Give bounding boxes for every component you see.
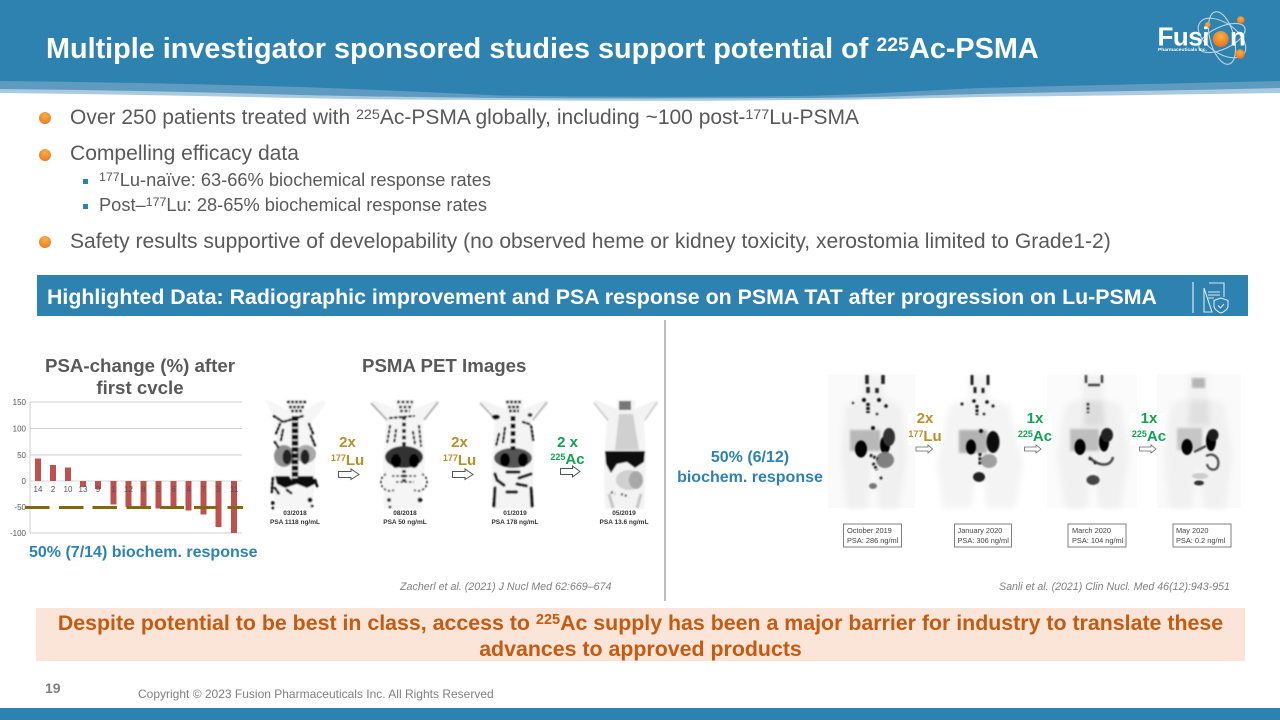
citation: Sanli: Sanli et al. (2021) Clin Nucl. Med 46(12):943-951 [999, 581, 1230, 593]
patient labels: 8 [141, 485, 146, 494]
treatment label: 2x 177Lu [331, 434, 364, 469]
treatment label: 2x 177Lu [443, 434, 476, 469]
arrows [338, 466, 580, 480]
bullet 2 [39, 149, 51, 161]
treatment label: 2 x 225Ac: 2 x [557, 434, 578, 451]
PSA label text [847, 526, 1226, 545]
scan 05/2019 [593, 400, 659, 509]
left PET image series [267, 400, 658, 526]
logo: Fusion Pharmaceuticals: Pharmaceuticals Inc. [1158, 47, 1207, 53]
treatment label: 2x 177Lu: 2x [451, 434, 468, 451]
PSA label text: PSA: 286 ng/ml [847, 536, 899, 545]
bar chart: PSA change [10, 398, 243, 538]
patient labels: 2 [51, 485, 56, 494]
patient labels: 5 [156, 485, 161, 494]
heading: PSMA PET images: PSMA PET Images [362, 355, 526, 376]
scan 01/2019 [480, 400, 549, 509]
PSA label text: October 2019 [847, 526, 892, 535]
icon: document with shield [1192, 282, 1229, 314]
bullet 1 [39, 112, 51, 124]
treatment label: 1x 225Ac [1018, 410, 1052, 445]
treatment label: 1x 225Ac: 225Ac [1018, 428, 1052, 445]
citation: Zacherl: Zacherl et al. (2021) J Nucl Med 62:669–674 [400, 581, 612, 593]
left scan captions: PSA 178 ng/mL [491, 519, 539, 526]
heading: PSA-change: first cvcle [96, 377, 184, 398]
panel divider [664, 320, 666, 601]
left scan captions: PSA 13.6 ng/mL [600, 519, 648, 526]
conclusion callout: advances to approved products [479, 637, 802, 661]
treatment label: 1x 225Ac: 225Ac [1132, 428, 1166, 445]
treatment label: 2 x 225Ac: 225Ac [550, 451, 585, 468]
patient labels: 7 [201, 485, 206, 494]
treatment label: 1x 225Ac [1132, 410, 1166, 445]
threshold line at -50% [25, 506, 243, 509]
left scan captions: 05/2019 [612, 510, 636, 517]
bullet 3 [39, 236, 51, 248]
title: Multiple investigator sponsored studies support potential of 225Ac-PSMA [46, 33, 1039, 65]
callout: biochemical response right: 50% (6/12) [711, 449, 789, 466]
axis labels: -50 [14, 503, 27, 512]
PSA label text: May 2020 [1176, 526, 1208, 535]
left scan captions: 03/2018 [283, 510, 307, 517]
treatment label: 2x 177Lu: 2x [339, 434, 356, 451]
scan 03/2018 [265, 400, 326, 510]
PSA label text: January 2020 [958, 526, 1002, 535]
treatment label: 2x 177Lu: 177Lu [908, 428, 942, 445]
footer bar [0, 708, 1280, 720]
patient labels: 6 [171, 485, 176, 494]
treatment label: 1x 225Ac: 1x [1141, 410, 1157, 427]
patient labels: 11 [230, 485, 239, 494]
scan 08/2018 [371, 400, 440, 509]
arrows [916, 445, 1156, 453]
treatment label: 2 x 225Ac [550, 434, 585, 468]
right PET image series [840, 374, 1233, 548]
bullet list [39, 106, 1111, 253]
PSA label text: PSA: 0.2 ng/ml [1176, 536, 1226, 545]
scan October 2019 [828, 375, 915, 508]
axis labels: 0 [22, 477, 27, 486]
PSA label text: March 2020 [1072, 526, 1111, 535]
patient labels [34, 485, 239, 494]
header band [0, 0, 1280, 101]
PSA label text: PSA: 306 ng/ml [958, 536, 1009, 545]
left scan captions: 08/2018 [393, 510, 417, 517]
PSA label text: PSA: 104 ng/ml [1072, 536, 1124, 545]
callout: biochemical response right [677, 449, 823, 486]
page number: 19 [45, 680, 61, 696]
sub-bullet 2 [83, 204, 88, 209]
scan May 2020 [1157, 374, 1241, 508]
treatment label: 2x 177Lu [908, 410, 942, 445]
patient labels: 14 [34, 485, 43, 494]
axis labels [10, 398, 27, 538]
patient labels: 9 [96, 485, 101, 494]
highlighted data banner [37, 275, 1248, 316]
logo: Fusion Pharmaceuticals: n [1230, 22, 1246, 52]
heading: PSA-change [45, 355, 235, 398]
axis labels: 100 [13, 424, 27, 434]
sub-bullet text 2: Post–177Lu: 28-65% biochemical response rates [99, 194, 487, 215]
axis labels: 50 [17, 451, 27, 460]
left scan captions: PSA 50 ng/mL [383, 519, 427, 526]
bullet text 3: Safety results supportive of developability (no observed heme or kidney toxicity, xerostomia limited to Grade1-2) [70, 230, 1111, 253]
banner heading: Highlighted Data: Radiographic improvement and PSA response on PSMA TAT after progression on Lu-PSMA [47, 285, 1157, 309]
copyright: Copyright © 2023 Fusion Pharmaceuticals Inc. All Rights Reserved [138, 687, 494, 701]
bullet text 2: Compelling efficacy data [70, 142, 299, 165]
patient labels: 10 [64, 485, 73, 494]
callout: biochemical response right: biochem. response [677, 469, 823, 486]
patient labels: 13 [79, 485, 88, 494]
left scan captions [270, 510, 648, 526]
scan January 2020 [937, 375, 1023, 508]
sub-bullet text 1: 177Lu-naïve: 63-66% biochemical response rates [99, 169, 491, 190]
conclusion callout: Despite potential to be best in class, access to 225Ac supply has been a major barrier for industry to translate these [58, 611, 1223, 635]
patient labels: 3 [216, 485, 221, 494]
white label backgrounds [908, 413, 1165, 445]
patient labels: 1 [111, 485, 116, 494]
scan March 2020 [1047, 375, 1137, 508]
bars [35, 458, 237, 533]
treatment label: 2x 177Lu: 177Lu [443, 452, 476, 469]
axis labels: 150 [13, 398, 27, 407]
PSA label boxes [844, 524, 1231, 547]
chart callout: biochemical response: 50% (7/14) biochem. response [29, 544, 258, 561]
sub-bullet 1 [83, 179, 88, 184]
conclusion callout [36, 608, 1245, 661]
axis labels: -100 [10, 529, 27, 538]
patient labels: 12 [124, 485, 133, 494]
logo: Fusion Pharmaceuticals [1158, 11, 1246, 65]
treatment label: 1x 225Ac: 1x [1027, 410, 1043, 427]
treatment label: 2x 177Lu: 2x [917, 410, 933, 427]
treatment label: 2x 177Lu: 177Lu [331, 452, 364, 469]
logo: Fusion Pharmaceuticals: Fusi [1158, 22, 1210, 52]
left scan captions: 01/2019 [503, 510, 527, 517]
heading: PSA-change: PSA-change (%) after [45, 355, 235, 376]
bullet text 1: Over 250 patients treated with 225Ac-PSMA globally, including ~100 post-177Lu-PSMA [70, 106, 859, 129]
left scan captions: PSA 1118 ng/mL [270, 519, 320, 526]
patient labels: 4 [186, 485, 191, 494]
